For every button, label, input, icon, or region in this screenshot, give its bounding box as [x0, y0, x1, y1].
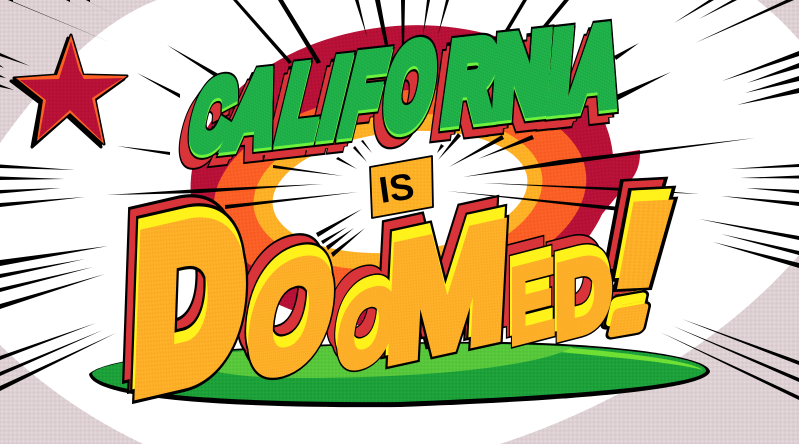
title word: CALIFORNIA: N — [481, 23, 545, 151]
title word: DOOMED!: O — [328, 250, 401, 384]
badge: IS: IS — [376, 165, 417, 211]
title word: CALIFORNIA: F — [332, 34, 395, 158]
title word: CALIFORNIA: N — [485, 18, 549, 146]
title word: CALIFORNIA: I — [307, 45, 353, 165]
concentric sun rings — [175, 5, 640, 347]
title word: DOOMED!: ! — [567, 150, 701, 355]
title word: CALIFORNIA: C — [175, 67, 240, 178]
title word: DOOMED!: O — [238, 222, 344, 413]
title word: CALIFORNIA: F — [332, 31, 395, 155]
title word: DOOMED!: E — [507, 226, 554, 358]
title word: CALIFORNIA: C — [180, 62, 245, 173]
title word: CALIFORNIA: I — [540, 17, 571, 139]
title word: CALIFORNIA: I — [303, 50, 349, 170]
title word: DOOMED!: ! — [572, 160, 706, 365]
title word: DOOMED!: O — [233, 212, 339, 403]
title word: DOOMED!: ! — [570, 149, 704, 354]
title word: DOOMED!: O — [320, 241, 393, 375]
title word: DOOMED!: E — [507, 226, 554, 358]
title word: DOOMED!: E — [504, 227, 551, 359]
title word: CALIFORNIA: A — [219, 51, 290, 168]
title word: CALIFORNIA: L — [265, 49, 331, 168]
title word: DOOMED!: M — [377, 178, 507, 385]
title word: DOOMED!: D — [553, 219, 610, 350]
title word: CALIFORNIA: A — [555, 18, 618, 144]
title word: CALIFORNIA: L — [270, 43, 335, 162]
title word: DOOMED!: ! — [579, 167, 677, 348]
title word: CALIFORNIA: A — [210, 64, 281, 181]
title word: DOOMED!: ! — [579, 167, 677, 348]
title word: CALIFORNIA: I — [545, 10, 575, 133]
title word: CALIFORNIA: I — [545, 10, 575, 133]
title word: CALIFORNIA: N — [481, 23, 545, 151]
title word: DOOMED!: O — [330, 261, 403, 395]
title word: CALIFORNIA: A — [219, 54, 290, 171]
title word: CALIFORNIA: R — [438, 18, 503, 144]
title word: DOOMED!: ! — [572, 160, 706, 365]
title word: CALIFORNIA: C — [171, 72, 236, 183]
title word: CALIFORNIA: I — [312, 37, 358, 157]
title word: CALIFORNIA: O — [376, 21, 445, 155]
title word: DOOMED!: E — [509, 237, 556, 369]
title word: CALIFORNIA: R — [433, 25, 498, 151]
title word: CALIFORNIA: I — [312, 37, 358, 157]
icon: red star — [11, 35, 127, 147]
title word: CALIFORNIA: F — [323, 44, 386, 168]
title word: DOOMED!: ! — [584, 177, 682, 358]
title word: DOOMED!: D — [126, 161, 243, 425]
title word: CALIFORNIA: C — [180, 62, 245, 173]
title word: DOOMED!: D — [129, 160, 246, 424]
title word: DOOMED!: D — [126, 161, 243, 425]
title word: CALIFORNIA: N — [486, 17, 549, 144]
title word: DOOMED!: O — [325, 251, 398, 385]
ground: green ellipse — [89, 342, 710, 407]
title word: DOOMED!: D — [553, 219, 610, 350]
title word: DOOMED!: D — [550, 220, 607, 351]
title word: CALIFORNIA: O — [371, 25, 440, 159]
title word: CALIFORNIA: I — [536, 23, 566, 146]
title word: DOOMED!: D — [550, 220, 607, 351]
title word: DOOMED!: O — [328, 250, 401, 384]
title word: DOOMED!: O — [238, 222, 344, 413]
title word: CALIFORNIA: I — [312, 40, 358, 160]
title word: CALIFORNIA: I — [312, 40, 358, 160]
title word: DOOMED!: D — [121, 151, 238, 415]
title word: DOOMED!: ! — [562, 140, 696, 345]
title word: DOOMED! — [122, 176, 678, 404]
title word: CALIFORNIA: A — [564, 8, 627, 134]
title word: CALIFORNIA: A — [219, 54, 290, 171]
title word: CALIFORNIA: O — [376, 18, 445, 152]
title word: DOOMED!: M — [382, 188, 512, 395]
title word: CALIFORNIA: R — [429, 31, 494, 157]
title word: DOOMED!: D — [555, 230, 612, 361]
title word: CALIFORNIA: N — [490, 10, 554, 138]
title word: CALIFORNIA: O — [367, 31, 436, 165]
title word: DOOMED!: M — [377, 178, 507, 385]
title word: DOOMED!: D — [129, 160, 246, 424]
title word: CALIFORNIA: C — [180, 59, 245, 170]
title word: DOOMED!: ! — [584, 177, 682, 358]
title word: DOOMED!: ! — [589, 187, 687, 368]
title word: CALIFORNIA: A — [219, 51, 290, 168]
title word: CALIFORNIA: L — [265, 51, 330, 170]
title word: CALIFORNIA: A — [560, 12, 623, 138]
badge: IS — [370, 156, 433, 218]
title word: DOOMED!: D — [121, 151, 238, 415]
title word: CALIFORNIA: A — [564, 5, 627, 131]
title word: CALIFORNIA: C — [180, 59, 245, 170]
title word: CALIFORNIA: R — [429, 31, 494, 157]
title word: DOOMED!: E — [509, 237, 556, 369]
title word: DOOMED!: E — [504, 227, 551, 359]
title word: CALIFORNIA: A — [559, 13, 622, 139]
title word: CALIFORNIA: I — [307, 43, 354, 163]
title word: CALIFORNIA: L — [270, 46, 335, 165]
title word: CALIFORNIA: I — [545, 13, 575, 136]
title word: CALIFORNIA: O — [371, 26, 440, 160]
title word: CALIFORNIA: F — [328, 38, 391, 162]
title word: CALIFORNIA: R — [433, 26, 498, 152]
title word: CALIFORNIA: N — [490, 13, 554, 141]
title word: CALIFORNIA: C — [171, 72, 236, 183]
title word: CALIFORNIA: L — [270, 43, 335, 162]
title word: DOOMED!: M — [372, 168, 502, 375]
title word: CALIFORNIA: A — [564, 5, 627, 131]
title word: DOOMED!: M — [380, 177, 510, 384]
title word: CALIFORNIA: I — [536, 23, 566, 146]
title word: CALIFORNIA: F — [327, 39, 390, 163]
title word: CALIFORNIA: O — [376, 21, 445, 155]
title word: DOOMED!: ! — [589, 187, 687, 368]
title word: CALIFORNIA: I — [303, 50, 349, 170]
title word: DOOMED!: D — [131, 171, 248, 435]
title word: DOOMED!: ! — [567, 150, 701, 355]
title word: CALIFORNIA: R — [438, 21, 503, 147]
title word: DOOMED!: ! — [570, 149, 704, 354]
title word: CALIFORNIA: N — [490, 13, 554, 141]
title word: DOOMED!: D — [545, 210, 602, 341]
title word: CALIFORNIA: I — [540, 18, 570, 141]
title word: CALIFORNIA: L — [261, 56, 326, 175]
title word: CALIFORNIA — [171, 5, 627, 183]
title word: CALIFORNIA: A — [214, 57, 286, 174]
title word: DOOMED!: O — [330, 261, 403, 395]
title word: DOOMED!: E — [499, 217, 546, 349]
title word: CALIFORNIA: O — [376, 18, 445, 152]
title word: DOOMED!: O — [325, 251, 398, 385]
title word: DOOMED!: D — [545, 210, 602, 341]
title word: DOOMED!: M — [382, 188, 512, 395]
title word: CALIFORNIA: A — [214, 59, 285, 176]
title word: CALIFORNIA: A — [555, 18, 618, 144]
title word: DOOMED!: D — [131, 171, 248, 435]
title word: CALIFORNIA: F — [332, 34, 395, 158]
title word: DOOMED!: O — [320, 241, 393, 375]
title word: CALIFORNIA: L — [270, 46, 335, 165]
title word: CALIFORNIA: O — [367, 31, 436, 165]
title word: CALIFORNIA: A — [210, 64, 281, 181]
title word: DOOMED!: O — [228, 202, 334, 393]
title word: DOOMED!: ! — [562, 140, 696, 345]
title word: CALIFORNIA: R — [438, 21, 503, 147]
title word: CALIFORNIA: F — [323, 44, 386, 168]
title word: DOOMED!: D — [555, 230, 612, 361]
title word: CALIFORNIA: R — [438, 18, 503, 144]
title word: DOOMED!: ! — [587, 176, 685, 357]
title word: DOOMED!: O — [236, 211, 342, 402]
title word: DOOMED!: M — [380, 177, 510, 384]
title word: CALIFORNIA: C — [176, 65, 241, 176]
title word: CALIFORNIA: A — [564, 8, 627, 134]
title word: CALIFORNIA: I — [545, 13, 575, 136]
title word: CALIFORNIA: F — [332, 31, 395, 155]
title word: DOOMED!: ! — [587, 176, 685, 357]
title word: DOOMED!: O — [236, 211, 342, 402]
title word: DOOMED!: M — [372, 168, 502, 375]
title word: DOOMED!: O — [228, 202, 334, 393]
title word: CALIFORNIA: N — [490, 10, 554, 138]
title word: DOOMED!: E — [499, 217, 546, 349]
title word: CALIFORNIA: L — [261, 56, 326, 175]
title word: DOOMED!: O — [233, 212, 339, 403]
